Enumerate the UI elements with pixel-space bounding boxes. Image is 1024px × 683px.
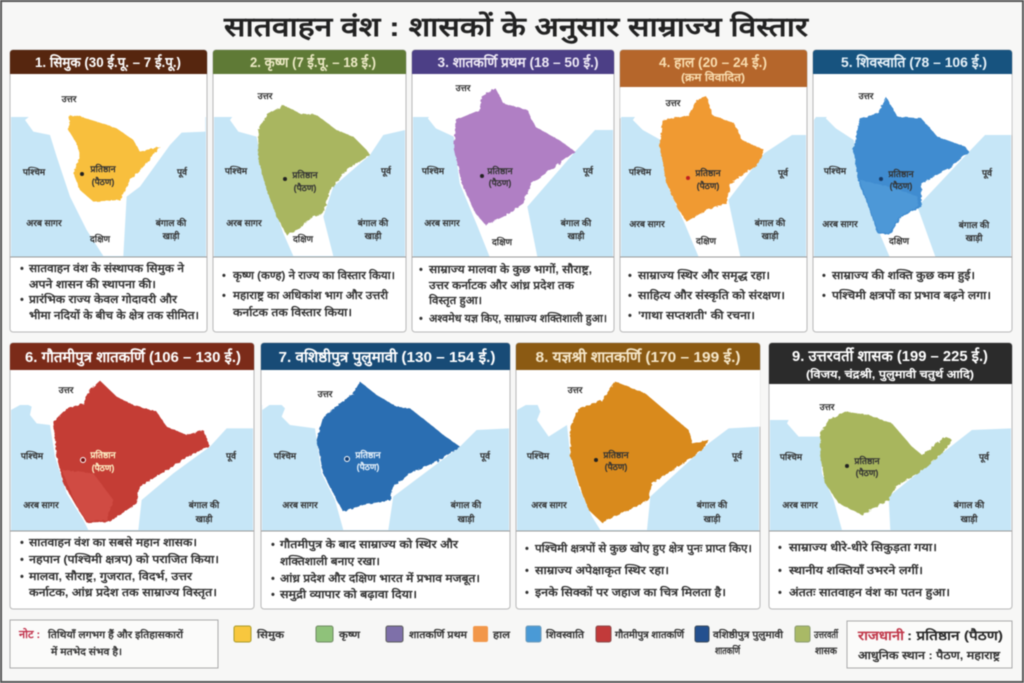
map land 9 [770,384,1011,530]
map labels 4: पश्चिम [628,166,652,177]
empire territory 2 [258,105,370,235]
map labels 5: पश्चिम [823,165,847,176]
legend: गौतमीपुत्र शातकर्णि [614,628,685,641]
text 7: समुद्री व्यापार को बढ़ावा दिया। [279,587,417,602]
legend: कृष्ण [338,630,361,641]
text 9: स्थानीय शक्तियाँ उभरने लगीं। [788,563,923,577]
text 4: • [628,290,632,302]
map labels 9: बंगाल की [953,499,985,510]
empire territory 5 [854,97,969,235]
map labels 2: खाड़ी [364,230,382,241]
header 1 [10,50,207,74]
map labels 1: पश्चिम [22,166,46,177]
map land 8 [517,370,760,530]
map labels 8: खाड़ी [703,513,721,524]
header 7 [261,343,510,370]
header 9: 9. उत्तरवर्ती शासक (199 – 225 ई.) [792,347,988,365]
map labels 3: अरब सागर [424,218,460,228]
text 1: सातवाहन वंश के संस्थापक सिमुक ने [28,261,185,276]
legend: शातकर्णि प्रथम [409,628,468,641]
map labels 8 [526,385,743,524]
text 7: • [271,589,275,601]
text 5: साम्राज्य की शक्ति कुछ कम हुई। [831,268,975,283]
text 4: 'गाथा सप्तशती' की रचना। [638,308,755,322]
map labels 7: बंगाल की [450,499,482,510]
map labels 7: खाड़ी [457,513,475,524]
text 2: महाराष्ट्र का अधिकांश भाग और उत्तरी [232,288,389,302]
empire territory 7 [317,382,460,512]
text 4: • [628,270,632,282]
panel: 8 Yajna Sri Satakarni [516,343,760,609]
text 1: • [20,294,24,306]
map labels 7 [273,389,491,524]
text 6: • [20,571,24,583]
map labels 1 [22,94,188,244]
capital box: : प्रतिष्ठान (पैठण) [907,628,1003,643]
header 7: 7. वशिष्ठीपुत्र पुलुमावी (130 – 154 ई.) [278,348,496,367]
text 5: • [822,270,826,282]
map land 2 [215,75,405,256]
map labels 3: पश्चिम [421,165,445,176]
text 6: नहपान (पश्चिमी क्षत्रप) को पराजित किया। [28,552,219,566]
text 6: • [20,537,24,549]
map labels 9: (पैठण) [856,467,878,478]
map labels 9: अरब सागर [782,500,818,510]
text 3: विस्तृत हुआ। [428,293,482,308]
text 6: मालवा, सौराष्ट्र, गुजरात, विदर्भ, उत्तर [28,569,193,584]
text 7: गौतमीपुत्र के बाद साम्राज्य को स्थिर और [279,537,459,552]
text 9: • [778,587,782,599]
map labels 9: उत्तर [819,402,835,412]
note box: में मतभेद संभव है। [50,645,122,658]
panel: 5 Shivasvati [813,50,1012,332]
map labels 7: पूर्व [479,450,491,462]
header 8: 8. यज्ञश्री शातकर्णि (170 – 199 ई.) [536,348,741,366]
legend: उत्तरवर्ती [813,628,839,641]
map labels 9: प्रतिष्ठान [853,455,881,466]
note box: तिथियाँ लगभग हैं और इतिहासकारों [47,628,184,641]
text 2: • [222,270,226,282]
map labels 1: उत्तर [61,94,77,104]
empire territory 3 [454,88,575,225]
map labels 6: अरब सागर [23,500,59,510]
map labels 3: (पैठण) [489,177,511,188]
map labels 5: प्रतिष्ठान [887,168,915,179]
map labels 8: पश्चिम [526,450,550,461]
map labels 6: पूर्व [225,450,237,462]
map labels 4: उत्तर [665,98,681,108]
header 9 [769,343,1012,384]
map labels 7: उत्तर [317,389,333,399]
map labels 8: उत्तर [567,385,583,395]
map labels 1: पूर्व [176,166,188,178]
note box [10,620,218,668]
panel: 7 Vasishthiputra Pulumavi [261,343,510,609]
map labels 7: पश्चिम [273,450,297,461]
text 3: • [419,264,423,276]
map land 3 [413,75,613,257]
header 3: 3. शातकर्णि प्रथम (18 – 50 ई.) [438,54,598,70]
text 8 [525,541,752,599]
text 6: सातवाहन वंश का सबसे महान शासक। [28,535,197,549]
header 4: 4. हाल (20 – 24 ई.) [659,54,767,70]
empire territory 1 [68,115,160,202]
map land 5 [814,75,1012,257]
map labels 5: पूर्व [981,167,993,179]
map labels 3: उत्तर [455,83,471,93]
text 1: प्रारंभिक राज्य केवल गोदावरी और [28,292,178,306]
map labels 1: दक्षिण [89,233,111,244]
header 5 [813,50,1012,74]
map land 6 [11,370,253,530]
legend: शासक [815,646,838,657]
panel: 9 Later rulers [769,343,1012,609]
text 7: आंध्र प्रदेश और दक्षिण भारत में प्रभाव मजबूत। [280,571,480,586]
text 8: • [525,565,529,577]
empire territory 6 [53,381,210,523]
map labels 3: खाड़ी [567,230,585,241]
map labels 5: अरब सागर [822,219,858,229]
map labels 1: अरब सागर [26,218,62,228]
capital box: आधुनिक स्थान : पैठण, महाराष्ट्र [858,648,1001,663]
map labels 3 [421,83,594,247]
map labels 3: प्रतिष्ठान [486,165,514,176]
lighter patch 5 [860,180,917,233]
text 6 [20,535,219,600]
empire territory 8 [570,382,709,523]
map labels 4: दक्षिण [695,235,717,246]
map labels 4: अरब सागर [629,219,665,229]
text 3: अश्वमेध यज्ञ किए, साम्राज्य शक्तिशाली हुआ। [429,311,607,326]
map labels 5: (पैठण) [890,180,912,191]
text 9: • [778,565,782,577]
map labels 6: प्रतिष्ठान [89,449,117,460]
map labels 7: अरब सागर [282,500,318,510]
legend [234,626,839,657]
map labels 1: खाड़ी [162,230,180,241]
panel: 3 Satakarni I [412,50,614,332]
map labels 3: दक्षिण [491,236,513,247]
text 2 [222,268,395,319]
map labels 6: पश्चिम [20,450,44,461]
text 9: • [778,542,782,554]
map labels 5 [822,91,993,246]
text 1: भीमा नदियों के बीच के क्षेत्र तक सीमित। [29,308,199,322]
map labels 2: पश्चिम [224,165,248,176]
map labels 9 [779,402,990,524]
map labels 6: (पैठण) [92,462,114,473]
text 7: • [271,573,275,585]
legend: सिमुक [256,628,286,641]
text 2: कर्नाटक तक विस्तार किया। [232,305,352,319]
text 5: • [822,290,826,302]
map labels 1: बंगाल की [155,217,187,228]
map labels 2 [224,91,392,244]
text 6: कर्नाटक, आंध्र प्रदेश तक साम्राज्य विस्तृत। [28,585,217,600]
title: सातवाहन वंश : शासकों के अनुसार साम्राज्य विस्तार [223,11,809,44]
legend: हाल [492,630,511,641]
map labels 5: उत्तर [858,91,874,101]
empire territory 9 [820,412,952,515]
text 8: साम्राज्य अपेक्षाकृत स्थिर रहा। [534,563,669,578]
empire territory 4 [659,97,764,222]
text 7: • [271,539,275,551]
text 1 [20,261,199,322]
text 7 [271,537,480,602]
text 6: • [20,554,24,566]
panel: 2 Krishna [213,50,406,332]
map labels 5: दक्षिण [888,235,910,246]
map labels 2: अरब सागर [226,218,262,228]
text 7: शक्तिशाली बनाए रखा। [280,554,380,568]
map labels 8: अरब सागर [531,500,567,510]
map labels 2: पूर्व [380,165,392,177]
header 2 [213,50,406,74]
map labels 5: बंगाल की [958,219,990,230]
text 3: उत्तर कर्नाटक और आंध्र प्रदेश तक [428,278,575,292]
map labels 8: पूर्व [731,450,743,462]
map labels 6: खाड़ी [195,513,213,524]
legend: शातकर्णि [715,644,741,657]
map labels 5: खाड़ी [965,232,983,243]
map labels 9: पश्चिम [779,451,803,462]
header 9: (विजय, चंद्रश्री, पुलुमावी चतुर्थ आदि) [806,367,974,382]
header 6 [10,343,254,370]
map labels 9: पूर्व [978,451,990,463]
header 5: 5. शिवस्वाति (78 – 106 ई.) [841,54,987,70]
text 3 [419,262,607,326]
map labels 2: बंगाल की [357,217,389,228]
map labels 3: बंगाल की [560,217,592,228]
map labels 8: बंगाल की [696,499,728,510]
lighter patch 6 [62,470,113,521]
map labels 6: उत्तर [58,385,74,395]
text 1: • [20,263,24,275]
text 4: • [628,310,632,322]
header 6: 6. गौतमीपुत्र शातकर्णि (106 – 130 ई.) [25,348,241,367]
map labels 4: खाड़ी [761,230,779,241]
map labels 4: बंगाल की [754,217,786,228]
text 9: साम्राज्य धीरे-धीरे सिकुड़ता गया। [788,540,937,555]
map labels 2: प्रतिष्ठान [291,169,319,180]
map land 7 [262,370,509,530]
panel: 4 Hala [620,50,807,332]
map labels 4: (पैठण) [697,180,719,191]
map labels 2: दक्षिण [292,233,314,244]
map labels 7: प्रतिष्ठान [354,449,382,460]
text 9 [778,540,950,600]
header 2: 2. कृष्ण (7 ई.पू. – 18 ई.) [250,54,376,72]
map labels 1: प्रतिष्ठान [89,163,117,174]
text 3: • [419,313,423,325]
map labels 2: (पैठण) [294,182,316,193]
map labels 7: (पैठण) [357,461,379,472]
text 4: साहित्य और संस्कृति को संरक्षण। [637,288,785,303]
text 8: • [525,587,529,599]
capital box [847,621,1012,668]
text 2: • [222,290,226,302]
header 3 [412,50,614,74]
legend: वशिष्ठीपुत्र पुलुमावी [712,628,783,641]
text 8: इनके सिक्कों पर जहाज का चित्र मिलता है। [534,585,726,599]
text 5 [822,268,991,302]
map labels 9: खाड़ी [960,513,978,524]
text 8: पश्चिमी क्षत्रपों से कुछ खोए हुए क्षेत्र पुनः प्राप्त किए। [534,541,752,556]
text 8: • [525,543,529,555]
map labels 1: (पैठण) [92,176,114,187]
map labels 4: पूर्व [777,167,789,179]
text 9: अंततः सातवाहन वंश का पतन हुआ। [789,586,950,600]
map labels 3: पूर्व [582,165,594,177]
header 8 [516,343,760,370]
map land 4 [620,88,806,257]
map labels 2: उत्तर [257,91,273,101]
capital box: राजधानी [857,628,905,643]
map labels 8: (पैठण) [605,461,627,472]
panel: 1 Simuka [10,50,207,332]
map labels 4 [628,98,789,246]
map labels 4: प्रतिष्ठान [694,167,722,178]
legend: शिवस्वाति [545,628,585,641]
text 3: साम्राज्य मालवा के कुछ भागों, सौराष्ट्र, [428,262,592,277]
map land 1 [11,75,205,256]
map labels 8: प्रतिष्ठान [602,449,630,460]
header 4: (क्रम विवादित) [681,70,745,84]
header 4 [620,50,807,87]
note box: नोट : [18,627,40,641]
header 1: 1. सिमुक (30 ई.पू. – 7 ई.पू.) [35,54,181,72]
text 2: कृष्ण (कण्ह) ने राज्य का विस्तार किया। [232,268,395,283]
text 5: पश्चिमी क्षत्रपों का प्रभाव बढ़ने लगा। [831,288,991,302]
map labels 6: बंगाल की [188,499,220,510]
map labels 6 [20,385,237,524]
text 4 [628,268,785,322]
panel: 6 Gautamiputra Satakarni [10,343,254,609]
text 4: साम्राज्य स्थिर और समृद्ध रहा। [637,268,770,283]
text 1: अपने शासन की स्थापना की। [29,277,156,291]
